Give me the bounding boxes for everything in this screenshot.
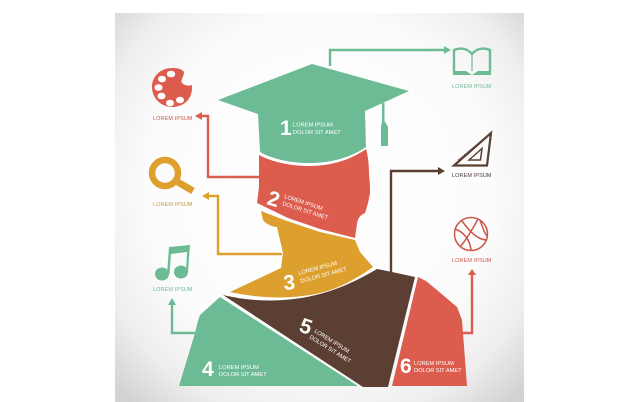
number 5: 5 — [296, 314, 315, 340]
arrowhead: magnifier — [202, 192, 209, 200]
segment 1: graduation cap — [218, 64, 409, 163]
arrowhead: book — [444, 46, 451, 54]
label: basketball: LOREM IPSUM — [452, 258, 492, 264]
number 6: 6 — [400, 355, 412, 378]
arrowhead: palette — [195, 112, 202, 120]
label 2: LOREM IPSUM — [283, 194, 323, 212]
arrow: red shoulder to basketball — [462, 274, 472, 333]
label: palette: LOREM IPSUM — [153, 116, 193, 122]
icon: magnifier — [152, 160, 193, 191]
label 1: DOLOR SIT AMET — [293, 130, 341, 136]
number 3: 3 — [282, 271, 296, 295]
label 6: DOLOR SIT AMET — [414, 368, 462, 374]
background panel — [115, 13, 524, 402]
icon: basketball — [454, 218, 488, 250]
label 1: LOREM IPSUM — [293, 122, 333, 128]
icon: palette — [152, 68, 192, 107]
segment 2: face — [257, 149, 370, 238]
segment 6: red shoulder — [392, 277, 467, 386]
segment 3: neck — [230, 211, 373, 297]
number 1: 1 — [280, 117, 292, 140]
segment 4: green shoulder — [179, 297, 358, 386]
label 4: DOLOR SIT AMET — [219, 372, 267, 378]
label 6: LOREM IPSUM — [414, 361, 454, 367]
number 2: 2 — [265, 187, 282, 212]
arrowhead: music — [168, 298, 176, 305]
segment 3: neck: DOLOR SIT AMET — [300, 267, 348, 285]
segment 5: brown chest: DOLOR SIT AMET — [308, 335, 352, 365]
label: book: LOREM IPSUM — [452, 84, 492, 90]
label: music: LOREM IPSUM — [153, 287, 193, 293]
label 4: LOREM IPSUM — [219, 365, 259, 371]
segment 5: brown chest — [223, 269, 415, 387]
icon: set square — [454, 133, 491, 166]
label: set square: LOREM IPSUM — [452, 173, 492, 179]
label 3: LOREM IPSUM — [298, 261, 338, 277]
arrowhead: basketball — [468, 269, 476, 275]
label: magnifier: LOREM IPSUM — [153, 202, 193, 208]
segment 2: face: DOLOR SIT AMET — [281, 201, 329, 222]
arrow: cap to book — [330, 50, 444, 66]
arrow: green shoulder to music — [172, 304, 195, 333]
icon: open book — [453, 49, 491, 75]
arrowhead: set square — [438, 167, 445, 175]
icon: music notes — [155, 245, 190, 280]
arrow: neck to magnifier — [208, 196, 282, 254]
number 4: 4 — [202, 358, 214, 381]
arrow: brown to set square — [391, 171, 439, 272]
tassel — [381, 103, 388, 146]
label 5: LOREM IPSUM — [313, 329, 350, 355]
arrow: face to palette — [201, 116, 259, 177]
